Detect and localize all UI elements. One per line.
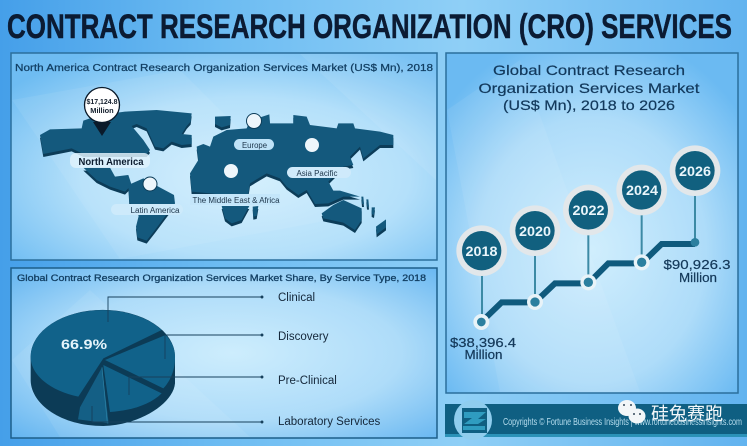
world map — [40, 110, 393, 244]
end value: $90,926.3 — [664, 258, 731, 272]
timeline heading — [478, 62, 700, 113]
legend: Pre-Clinical: Pre-Clinical — [278, 375, 337, 387]
start value: $38,396.4 — [450, 336, 516, 350]
start value: Million — [464, 348, 503, 362]
label: Asia Pacific — [287, 138, 351, 178]
label: Europe — [234, 114, 274, 150]
leader lines — [92, 296, 263, 423]
label: Latin America — [111, 177, 183, 215]
label: The Middle East and Africa: The Middle East & Africa — [192, 196, 280, 205]
footer banner — [445, 400, 747, 440]
label: Europe: Europe — [242, 141, 268, 150]
legend: Discovery: Discovery — [278, 331, 329, 343]
timeline heading: Global Contract Research — [493, 62, 685, 78]
start value — [450, 336, 516, 362]
map heading: North America Contract Research Organization Services Market (US$ Mn), 2018 — [15, 63, 434, 74]
callout: North America value pin: $17,124.8 — [86, 97, 118, 106]
callout: North America value pin — [84, 88, 120, 136]
pie value: 66.9% — [61, 336, 108, 352]
label: Asia Pacific: Asia Pacific — [296, 169, 338, 178]
legend: Clinical: Clinical — [278, 292, 315, 304]
panel: North America map — [11, 53, 437, 260]
panel: global market timeline — [446, 53, 738, 393]
end value — [664, 258, 731, 285]
pie heading: Global Contract Research Organization Services Market Share, By Service Type, 2018 — [17, 273, 426, 284]
year labels: 2022 — [572, 203, 604, 218]
legend: Laboratory Services: Laboratory Services — [278, 416, 381, 428]
watermark text: 硅兔赛跑 — [651, 400, 723, 426]
panel: market share by service type — [11, 268, 437, 438]
year labels: 2026 — [679, 164, 712, 179]
icon: company logo — [454, 400, 492, 440]
timeline heading: (US$ Mn), 2018 to 2026 — [503, 97, 675, 113]
icon: WeChat watermark — [618, 400, 646, 424]
pie chart — [31, 310, 175, 426]
label: The Middle East and Africa — [190, 164, 280, 205]
step line chart — [456, 145, 720, 330]
end value: Million — [679, 271, 717, 285]
year labels: 2024 — [626, 183, 659, 198]
callout: North America value pin: Million — [90, 106, 114, 115]
year labels: 2018 — [466, 244, 498, 259]
label: Latin America: Latin America — [130, 206, 180, 215]
label: North America: North America — [78, 156, 144, 168]
timeline heading: Organization Services Market — [478, 80, 700, 96]
year labels: 2020 — [519, 224, 551, 239]
year labels — [466, 164, 712, 259]
